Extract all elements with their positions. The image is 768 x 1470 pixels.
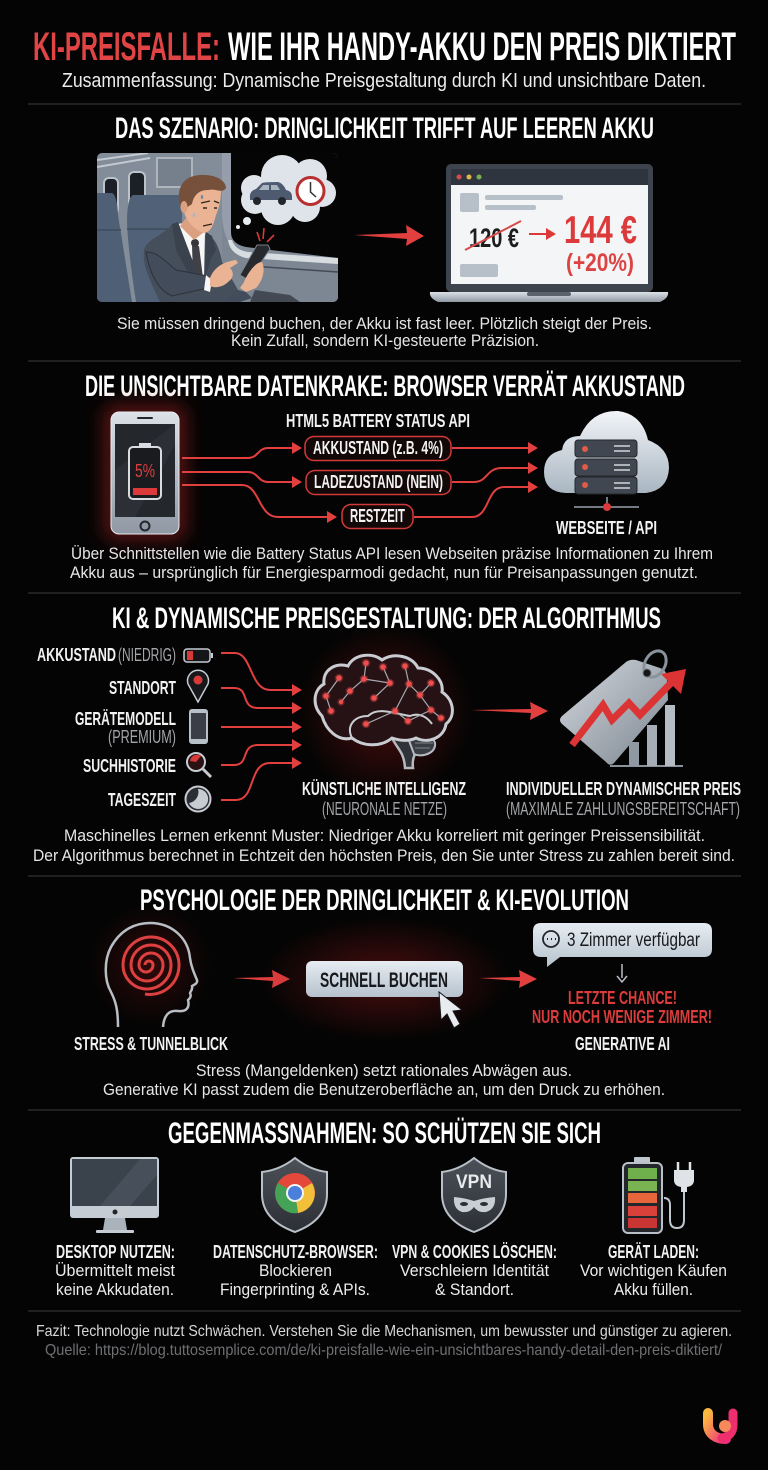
tip: VPN und Cookies: VPN & COOKIES LÖSCHEN: xyxy=(392,1242,557,1262)
icon: magnifier xyxy=(187,753,211,777)
tip: Desktop nutzen: keine Akkudaten. xyxy=(56,1280,174,1299)
tip: Geraet laden: Vor wichtigen Käufen xyxy=(580,1261,727,1280)
arrow: brain to price xyxy=(471,702,548,720)
icon: desktop monitor xyxy=(70,1157,159,1233)
tip: VPN und Cookies xyxy=(392,1242,557,1299)
input labels: (PREMIUM) xyxy=(108,727,176,747)
icon: car xyxy=(250,182,292,200)
text block: scenario description xyxy=(117,314,652,350)
label: Kuenstliche Intelligenz: KÜNSTLICHE INTELLIGENZ xyxy=(302,779,466,799)
input labels: TAGESZEIT xyxy=(108,790,176,810)
text: urgency message xyxy=(532,988,712,1027)
arrow: stress to button xyxy=(233,970,290,988)
suit xyxy=(144,224,238,302)
icon: head with stress spiral xyxy=(88,903,212,1027)
text block: API description xyxy=(70,544,713,582)
icon: low battery xyxy=(184,649,213,662)
tip: Datenschutz-Browser: Fingerprinting & APIs. xyxy=(220,1280,370,1299)
arrows: inputs to brain xyxy=(221,653,302,800)
text block: scenario description: Kein Zufall, sondern KI-gesteuerte Präzision. xyxy=(231,331,539,350)
text block: algorithm description xyxy=(33,826,735,865)
label: Generative AI: GENERATIVE AI xyxy=(575,1034,670,1054)
tip: VPN und Cookies: Verschleiern Identität xyxy=(400,1261,549,1280)
new price: 144 € xyxy=(564,209,637,252)
header xyxy=(33,25,736,92)
icon: battery with plug xyxy=(623,1157,694,1233)
panel: Psychologie xyxy=(74,884,712,1099)
icon: clock moon xyxy=(186,786,210,812)
chip: Akkustand: AKKUSTAND (z.B. 4%) xyxy=(313,438,443,458)
phone and hand xyxy=(240,245,270,280)
icon: VPN shield with mask: VPN xyxy=(456,1172,492,1193)
icon: mouse cursor xyxy=(439,992,462,1028)
label: Webseite / API: WEBSEITE / API xyxy=(556,518,657,538)
callout: rooms available: 3 Zimmer verfügbar xyxy=(567,930,701,951)
chip: Restzeit xyxy=(342,504,413,528)
input labels: SUCHHISTORIE xyxy=(83,756,176,776)
icon: phone xyxy=(189,709,208,744)
callout: rooms available xyxy=(533,923,712,967)
label: Stress und Tunnelblick: STRESS & TUNNELBLICK xyxy=(74,1034,228,1054)
left arm xyxy=(146,252,208,296)
arrow: button to generative AI xyxy=(479,970,537,988)
panel: Datenkrake xyxy=(70,370,713,582)
icon: VPN shield with mask xyxy=(442,1158,506,1232)
icon: dynamic price tag and chart xyxy=(560,647,686,766)
subtitle: Zusammenfassung: Dynamische Preisgestaltung durch KI und unsichtbare Daten. xyxy=(62,70,706,92)
tip: Desktop nutzen xyxy=(55,1242,175,1299)
arrows: battery data flows xyxy=(182,442,538,523)
label: Individueller dynamischer Preis xyxy=(506,779,741,819)
title: KI-PREISFALLE: xyxy=(33,25,220,69)
logo xyxy=(708,1413,733,1439)
seat base xyxy=(250,290,300,302)
button: Schnell buchen: SCHNELL BUCHEN xyxy=(320,969,448,992)
illustration: laptop with price jump xyxy=(430,164,668,302)
icon: clock xyxy=(297,178,324,204)
text block: scenario description: Sie müssen dringend buchen, der Akku ist fast leer. Plötzlich steigt der Preis. xyxy=(117,314,652,333)
illustration: laptop with price jump: (+20%) xyxy=(566,249,634,277)
chip: Ladezustand: LADEZUSTAND (NEIN) xyxy=(314,472,443,492)
arrow: scenario to laptop xyxy=(354,225,424,246)
tip: Desktop nutzen: DESKTOP NUTZEN: xyxy=(56,1242,175,1262)
icon: phone with low battery xyxy=(103,404,187,541)
icon: shield with browser logo xyxy=(262,1158,327,1232)
text block: psychology description: Stress (Mangeldenken) setzt rationales Abwägen aus. xyxy=(196,1061,572,1080)
label: HTML5 Battery Status API: HTML5 BATTERY STATUS API xyxy=(286,411,470,431)
arrow: down xyxy=(617,964,627,982)
label: Kuenstliche Intelligenz xyxy=(302,779,466,819)
tip: Datenschutz-Browser: Blockieren xyxy=(259,1261,332,1280)
button: Schnell buchen xyxy=(260,917,510,1041)
panel: Gegenmassnahmen xyxy=(55,1117,727,1299)
icon: thought bubble with car and clock xyxy=(236,155,336,229)
icon: location pin xyxy=(188,670,208,702)
text block: API description: Akku aus – ursprünglich für Energiesparmodi gedacht, nun für Preisanpassungen genutzt. xyxy=(70,563,698,582)
tip: Geraet laden xyxy=(580,1242,727,1299)
input labels: STANDORT xyxy=(109,678,176,698)
footer xyxy=(36,1323,732,1359)
illustration: man on train with phone xyxy=(97,153,338,302)
text: urgency message: LETZTE CHANCE! xyxy=(568,988,677,1008)
icon: phone with low battery: 5% xyxy=(135,461,155,481)
tip: Datenschutz-Browser: DATENSCHUTZ-BROWSER: xyxy=(213,1242,378,1262)
tip: Desktop nutzen: Übermittelt meist xyxy=(55,1261,175,1280)
input labels: AKKUSTAND xyxy=(37,645,116,665)
chip: Restzeit: RESTZEIT xyxy=(350,506,405,526)
chip: Ladezustand xyxy=(306,470,451,494)
icon: neural brain xyxy=(297,624,473,800)
input labels: GERÄTEMODELL xyxy=(75,709,176,729)
text block: algorithm description: Maschinelles Lernen erkennt Muster: Niedriger Akku korreliert mit geringer Preissensibilität. xyxy=(64,826,705,845)
icon: cloud server xyxy=(544,411,669,511)
text block: API description: Über Schnittstellen wie die Battery Status API lesen Webseiten präzise Informationen zu Ihrem xyxy=(71,544,713,563)
tip: Geraet laden: GERÄT LADEN: xyxy=(608,1242,699,1262)
text block: psychology description xyxy=(103,1061,665,1099)
old price: 120 € xyxy=(469,223,519,253)
tip: VPN und Cookies: & Standort. xyxy=(435,1280,514,1299)
label: Kuenstliche Intelligenz: (NEURONALE NETZE) xyxy=(322,799,447,819)
chip: Akkustand xyxy=(305,436,451,460)
tip: Datenschutz-Browser xyxy=(213,1242,378,1299)
tip: Geraet laden: Akku füllen. xyxy=(614,1280,693,1299)
input labels: (NIEDRIG) xyxy=(118,645,176,665)
neck and head xyxy=(180,218,204,240)
input labels xyxy=(37,645,176,810)
title xyxy=(33,25,736,69)
panel: Szenario xyxy=(97,112,668,350)
text block: psychology description: Generative KI passt zudem die Benutzeroberfläche an, um den Druck zu erhöhen. xyxy=(103,1080,665,1099)
panel: Algorithmus xyxy=(33,602,741,865)
